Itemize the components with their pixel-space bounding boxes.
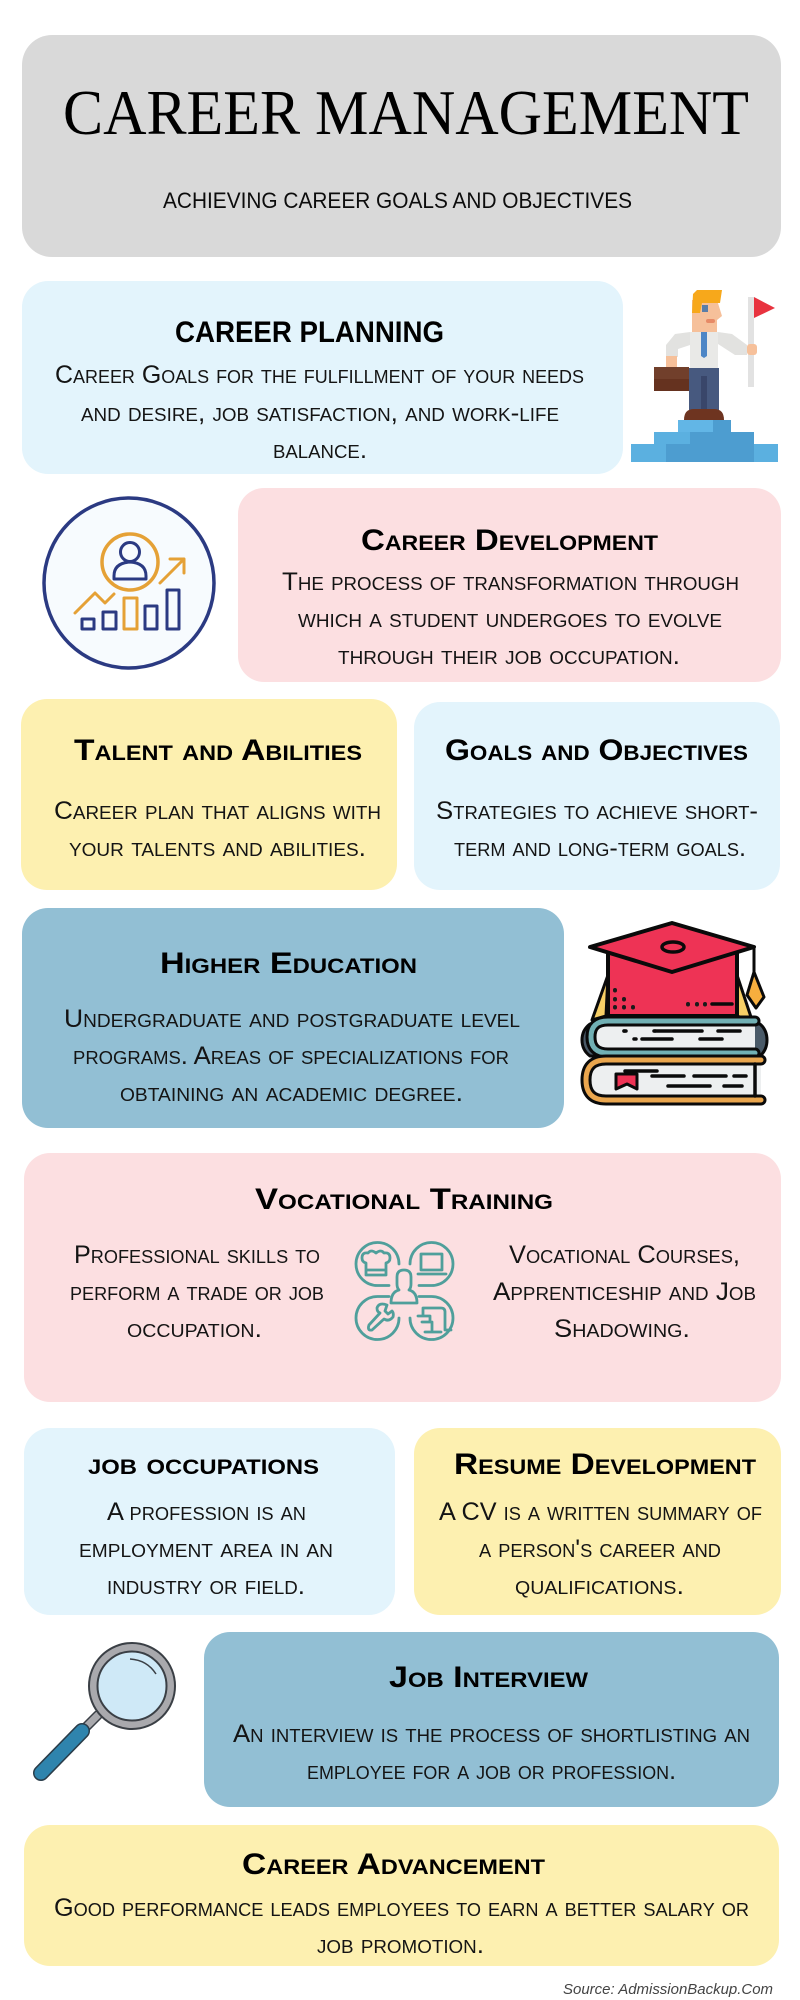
heading: career development: Career Development bbox=[361, 524, 658, 557]
text: vocational courses bbox=[493, 1241, 756, 1343]
text: vocational courses: Shadowing. bbox=[554, 1315, 690, 1343]
heading: talent and abilities: Talent and Abilities bbox=[74, 734, 362, 767]
text: career development description: which a student undergoes to evolve bbox=[298, 605, 722, 633]
text: higher education description: Undergraduate and postgraduate level bbox=[64, 1005, 520, 1033]
text: job occupations description: A profession is an bbox=[107, 1498, 306, 1526]
text: job interview description: An interview is the process of shortlisting an bbox=[233, 1720, 750, 1748]
text: career advancement description bbox=[54, 1894, 749, 1959]
text: career development description: through their job occupation. bbox=[338, 642, 680, 670]
text: career planning description: balance. bbox=[273, 436, 367, 464]
text: higher education description bbox=[64, 1005, 520, 1107]
text: professional skills: perform a trade or job bbox=[70, 1278, 324, 1306]
subtitle: ACHIEVING CAREER GOALS AND OBJECTIVES bbox=[163, 188, 632, 213]
text: job interview description: employee for a job or profession. bbox=[307, 1757, 676, 1785]
panel: resume development bbox=[414, 1428, 781, 1615]
text: career planning description: Career Goals for the fulfillment of your needs bbox=[55, 361, 584, 389]
icon: businessman with flag on steps bbox=[631, 290, 778, 462]
heading: career planning: CAREER PLANNING bbox=[175, 316, 444, 349]
text: resume description: A CV is a written summary of bbox=[439, 1498, 762, 1526]
title: CAREER MANAGEMENT bbox=[63, 78, 749, 148]
text: goals description: term and long-term goals. bbox=[454, 834, 746, 862]
panel: job occupations bbox=[24, 1428, 395, 1615]
panel: goals and objectives bbox=[414, 702, 780, 890]
panel: career planning bbox=[22, 281, 623, 474]
panel: talent and abilities bbox=[21, 699, 397, 890]
icon: magnifying glass bbox=[41, 1643, 175, 1773]
text: professional skills: Professional skills to bbox=[74, 1241, 320, 1269]
heading: vocational training: Vocational Training bbox=[255, 1183, 553, 1216]
text: career planning description: and desire, job satisfaction, and work-life bbox=[81, 399, 559, 427]
text: talent description: Career plan that aligns with bbox=[54, 797, 381, 825]
text: job occupations description bbox=[79, 1498, 333, 1600]
icon: graduation cap on books bbox=[582, 923, 767, 1100]
text: job occupations description: industry or field. bbox=[107, 1572, 305, 1600]
text: resume description bbox=[439, 1498, 762, 1600]
text: resume description: qualifications. bbox=[515, 1572, 684, 1600]
text: career advancement description: job promotion. bbox=[317, 1931, 484, 1959]
heading: resume development: Resume Development bbox=[454, 1448, 756, 1481]
text: talent description bbox=[54, 797, 381, 862]
text: career development description bbox=[282, 568, 739, 670]
text: job occupations description: employment area in an bbox=[79, 1535, 333, 1563]
heading: job occupations: job occupations bbox=[88, 1448, 319, 1481]
source credit: Source: AdmissionBackup.Com bbox=[563, 1981, 773, 1998]
text: talent description: your talents and abilities. bbox=[69, 834, 366, 862]
heading: goals and objectives: Goals and Objectives bbox=[445, 734, 748, 767]
text: career planning description bbox=[55, 361, 584, 464]
text: job interview description bbox=[233, 1720, 750, 1785]
panel: title banner bbox=[22, 35, 781, 257]
panel: career development bbox=[238, 488, 781, 682]
panel: job interview bbox=[204, 1632, 779, 1807]
text: goals description: Strategies to achieve short- bbox=[436, 797, 758, 825]
panel: career advancement bbox=[24, 1825, 779, 1966]
text: career development description: The process of transformation through bbox=[282, 568, 739, 596]
text: vocational courses: Apprenticeship and Job bbox=[493, 1278, 756, 1306]
icon: person and growth chart in circle bbox=[44, 498, 214, 668]
text: vocational courses: Vocational Courses, bbox=[509, 1241, 740, 1269]
text: resume description: a person's career and bbox=[479, 1535, 721, 1563]
text: professional skills: occupation. bbox=[127, 1315, 262, 1343]
text: professional skills bbox=[70, 1241, 324, 1343]
text: goals description bbox=[436, 797, 758, 862]
text: higher education description: obtaining an academic degree. bbox=[120, 1079, 463, 1107]
panel: vocational training bbox=[24, 1153, 781, 1402]
heading: job interview: Job Interview bbox=[389, 1661, 588, 1694]
heading: career advancement: Career Advancement bbox=[242, 1848, 545, 1881]
panel: higher education bbox=[22, 908, 564, 1128]
icon: vocational trades bbox=[356, 1242, 453, 1340]
text: higher education description: programs. Areas of specializations for bbox=[73, 1042, 509, 1070]
heading: higher education: Higher Education bbox=[160, 947, 417, 980]
text: career advancement description: Good performance leads employees to earn a better salary or bbox=[54, 1894, 749, 1922]
